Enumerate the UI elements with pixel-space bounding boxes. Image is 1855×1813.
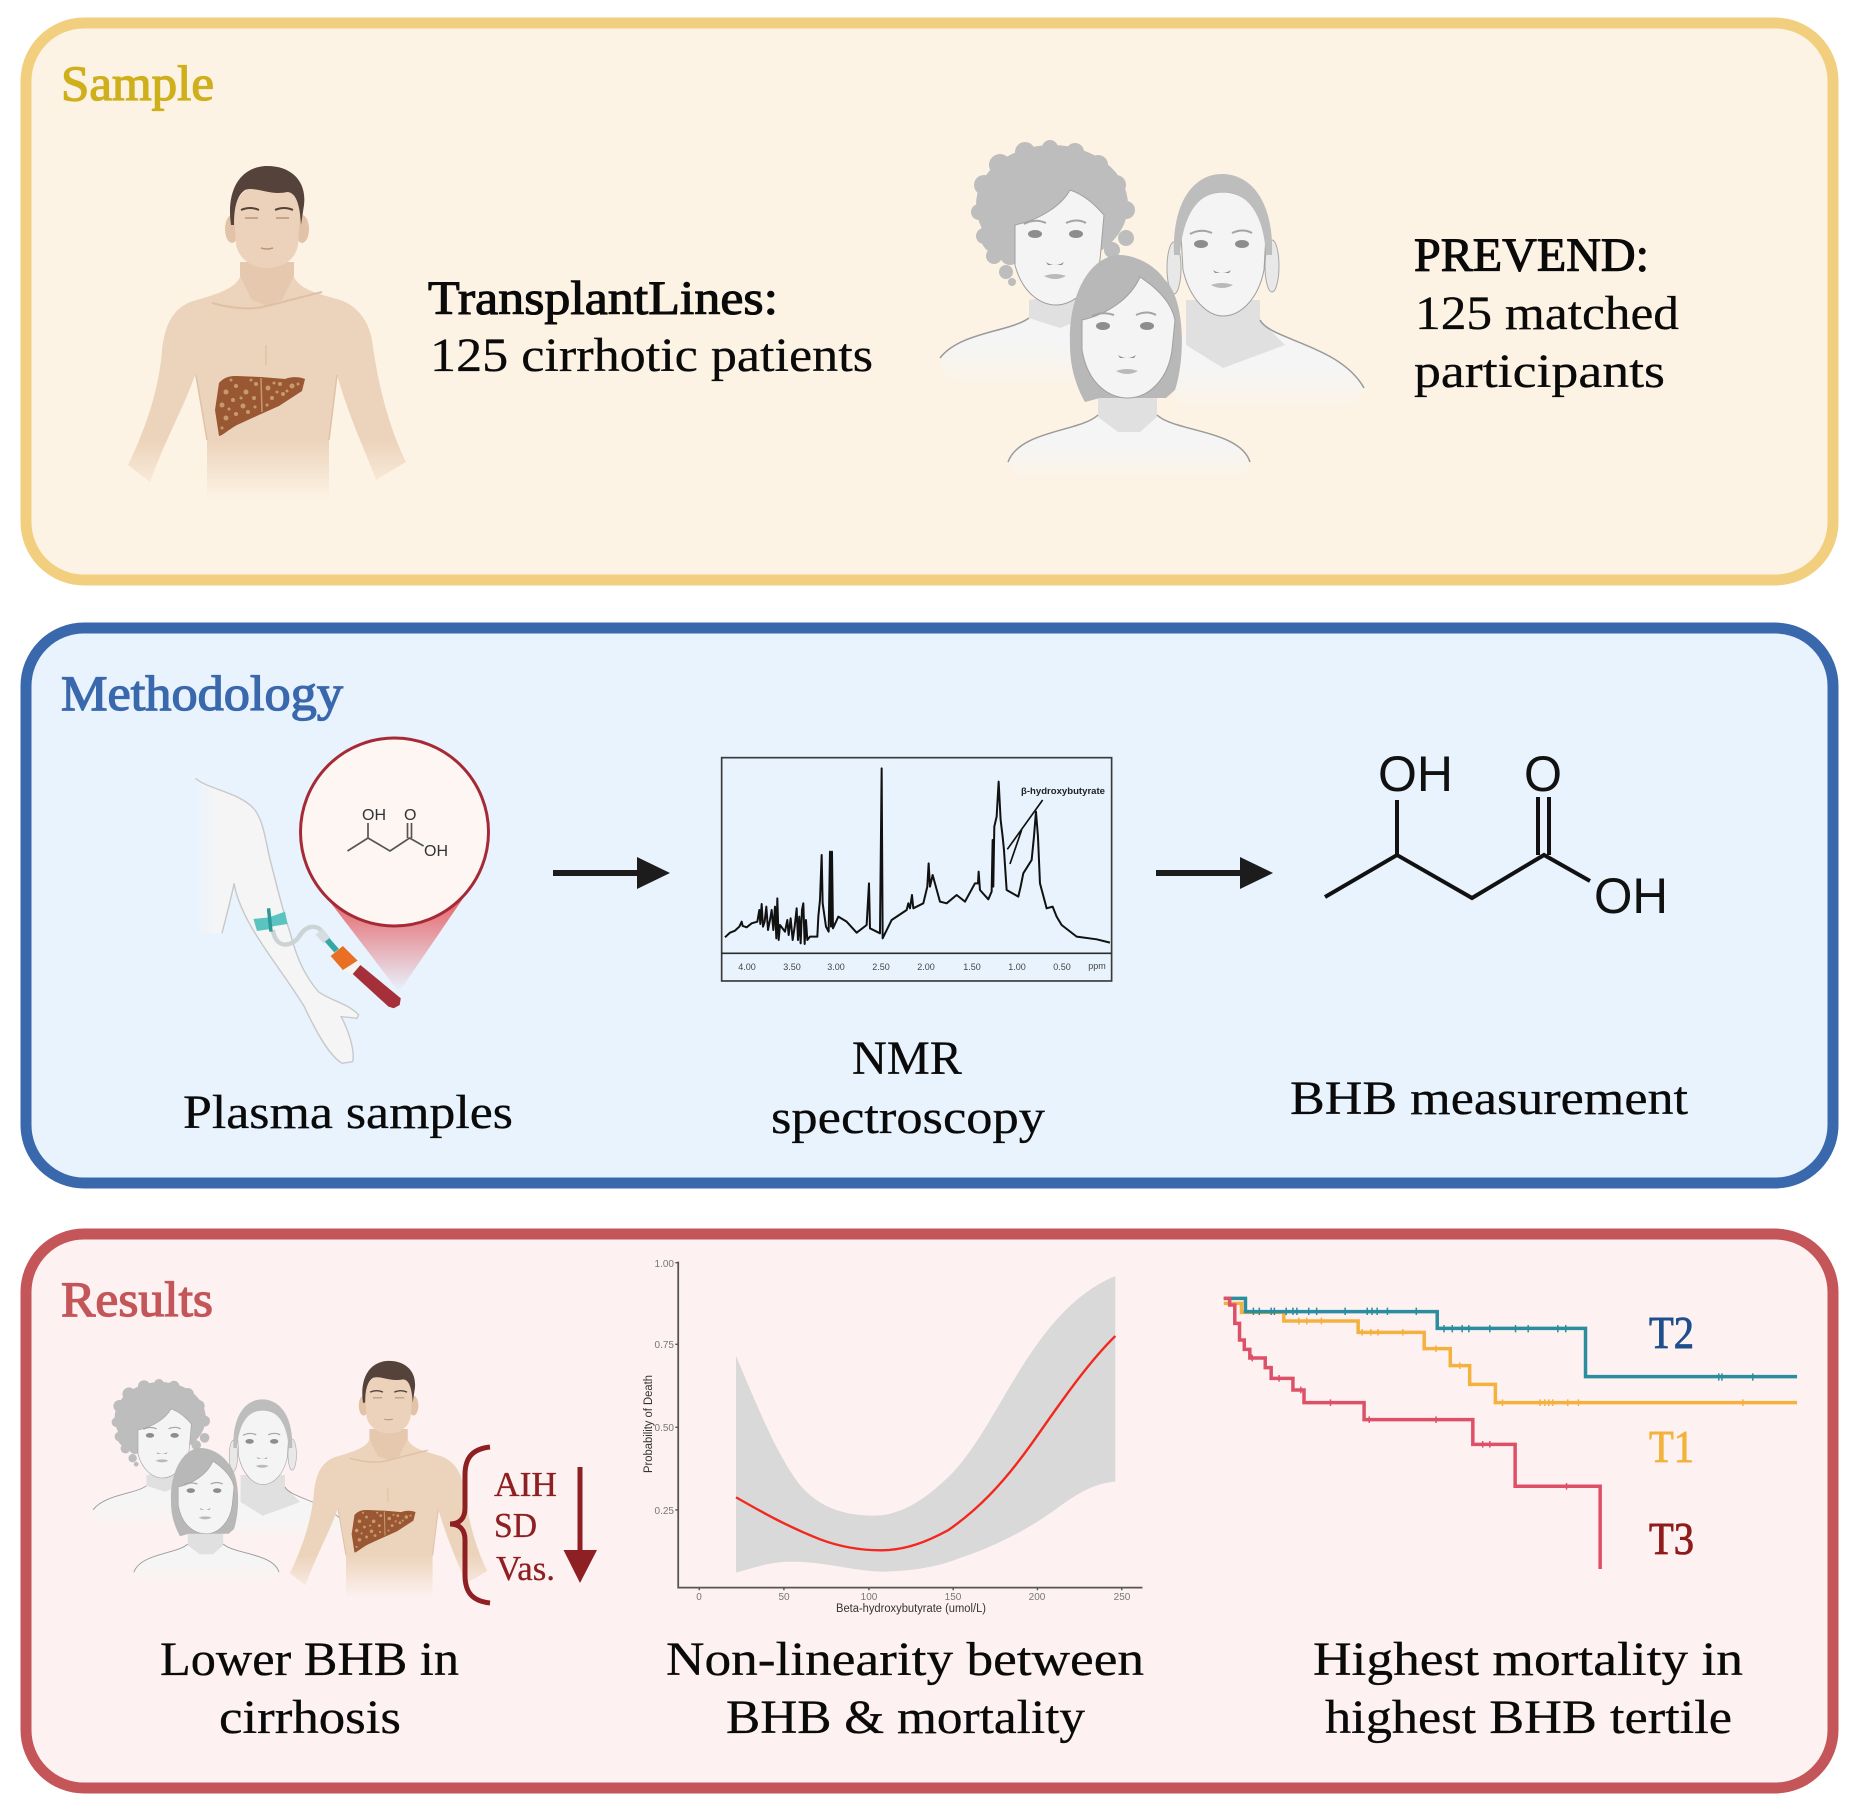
label: Highest mortality: Highest mortality in bbox=[1313, 1633, 1743, 1686]
text: PREVEND: participants bbox=[1414, 345, 1665, 398]
icon: arm with blood draw: OH bbox=[362, 807, 386, 824]
label: Lower BHB bbox=[160, 1633, 459, 1744]
arrow: plasma to NMR bbox=[553, 857, 670, 889]
text: TransplantLines: TransplantLines: bbox=[428, 272, 778, 325]
brace with AIH SD Vas: Vas. bbox=[496, 1549, 555, 1588]
icon: arm with blood draw bbox=[196, 738, 488, 1063]
icon: arm with blood draw: OH bbox=[424, 843, 448, 860]
chart: NMR spectrum: 2.50 bbox=[872, 962, 890, 972]
label: Non-linearity bbox=[666, 1633, 1144, 1744]
chart: NMR spectrum bbox=[722, 758, 1112, 981]
heading: Sample: Sample bbox=[61, 55, 214, 111]
molecule: beta-hydroxybutyrate: O bbox=[1524, 746, 1562, 802]
brace with AIH SD Vas bbox=[450, 1447, 557, 1603]
chart: NMR spectrum: 3.50 bbox=[783, 962, 801, 972]
label: Highest mortality: highest BHB tertile bbox=[1325, 1691, 1732, 1744]
text: TransplantLines bbox=[428, 272, 873, 382]
person: curly hair bbox=[940, 140, 1135, 388]
label: NMR spectroscopy bbox=[771, 1032, 1045, 1144]
chart: probability of death vs BHB: 50 bbox=[778, 1592, 790, 1603]
label: Plasma samples: Plasma samples bbox=[183, 1086, 513, 1139]
chart: probability of death vs BHB: 200 bbox=[1029, 1592, 1046, 1603]
label: Non-linearity: Non-linearity between bbox=[666, 1633, 1144, 1686]
chart: NMR spectrum: 1.50 bbox=[963, 962, 981, 972]
arrow: NMR to BHB bbox=[1156, 857, 1273, 889]
label: T2: T2 bbox=[1649, 1307, 1694, 1358]
label: BHB measurement: BHB measurement bbox=[1290, 1072, 1689, 1125]
panel: sample bbox=[26, 23, 1833, 580]
brace with AIH SD Vas: SD bbox=[494, 1506, 537, 1545]
chart: probability of death vs BHB: 150 bbox=[945, 1592, 962, 1603]
panel: methodology bbox=[26, 628, 1833, 1183]
chart: Kaplan-Meier curves bbox=[1224, 1298, 1797, 1569]
chart: NMR spectrum: 3.00 bbox=[827, 962, 845, 972]
icon: participants bbox=[93, 1379, 347, 1584]
label: T3: T3 bbox=[1649, 1513, 1694, 1564]
chart: probability of death vs BHB: 100 bbox=[861, 1592, 878, 1603]
chart: NMR spectrum: ppm bbox=[1088, 961, 1106, 971]
chart: probability of death vs BHB bbox=[643, 1259, 1142, 1615]
icon: arm with blood draw: O bbox=[404, 807, 416, 824]
label: Non-linearity: BHB & mortality bbox=[726, 1691, 1085, 1744]
chart: NMR spectrum: 0.50 bbox=[1053, 962, 1071, 972]
text: PREVEND: 125 matched bbox=[1415, 287, 1679, 340]
chart: probability of death vs BHB: 0.50 bbox=[655, 1423, 674, 1434]
chart: NMR spectrum: β-hydroxybutyrate bbox=[1021, 786, 1105, 797]
chart: NMR spectrum: 1.00 bbox=[1008, 962, 1026, 972]
label: T1: T1 bbox=[1649, 1421, 1694, 1472]
text: PREVEND bbox=[1414, 229, 1679, 398]
chart: probability of death vs BHB: 250 bbox=[1114, 1592, 1131, 1603]
chart: probability of death vs BHB: Probability of Death bbox=[643, 1375, 655, 1473]
icon: man with liver bbox=[290, 1361, 487, 1598]
chart: probability of death vs BHB: 1.00 bbox=[655, 1259, 674, 1270]
label: NMR spectroscopy: spectroscopy bbox=[771, 1091, 1045, 1144]
label: Lower BHB: Lower BHB in bbox=[160, 1633, 459, 1686]
brace with AIH SD Vas: AIH bbox=[494, 1465, 557, 1504]
label: Lower BHB: cirrhosis bbox=[219, 1691, 401, 1744]
molecule: beta-hydroxybutyrate: OH bbox=[1594, 868, 1668, 924]
chart: probability of death vs BHB: 0 bbox=[696, 1592, 702, 1603]
chart: NMR spectrum: 2.00 bbox=[917, 962, 935, 972]
chart: NMR spectrum: 4.00 bbox=[738, 962, 756, 972]
heading: Results: Results bbox=[61, 1271, 213, 1327]
panel: results bbox=[26, 1234, 1833, 1788]
heading: Methodology: Methodology bbox=[61, 665, 343, 721]
text: PREVEND: PREVEND: bbox=[1414, 229, 1649, 282]
chart: probability of death vs BHB: 0.25 bbox=[655, 1506, 674, 1517]
label: NMR spectroscopy: NMR bbox=[852, 1032, 962, 1085]
icon: three matched participants bbox=[940, 140, 1364, 482]
icon: man with cirrhotic liver bbox=[128, 166, 406, 500]
arrow: decreased bbox=[564, 1467, 597, 1583]
label: Highest mortality bbox=[1313, 1633, 1743, 1744]
molecule: beta-hydroxybutyrate bbox=[1325, 746, 1668, 924]
text: TransplantLines: 125 cirrhotic patients bbox=[430, 329, 873, 382]
chart: probability of death vs BHB: 0.75 bbox=[655, 1340, 674, 1351]
person: front bbox=[1008, 255, 1250, 482]
person: short hair bbox=[1167, 174, 1364, 412]
molecule: beta-hydroxybutyrate: OH bbox=[1378, 746, 1453, 802]
chart: probability of death vs BHB: Beta-hydroxybutyrate (umol/L) bbox=[836, 1603, 986, 1615]
